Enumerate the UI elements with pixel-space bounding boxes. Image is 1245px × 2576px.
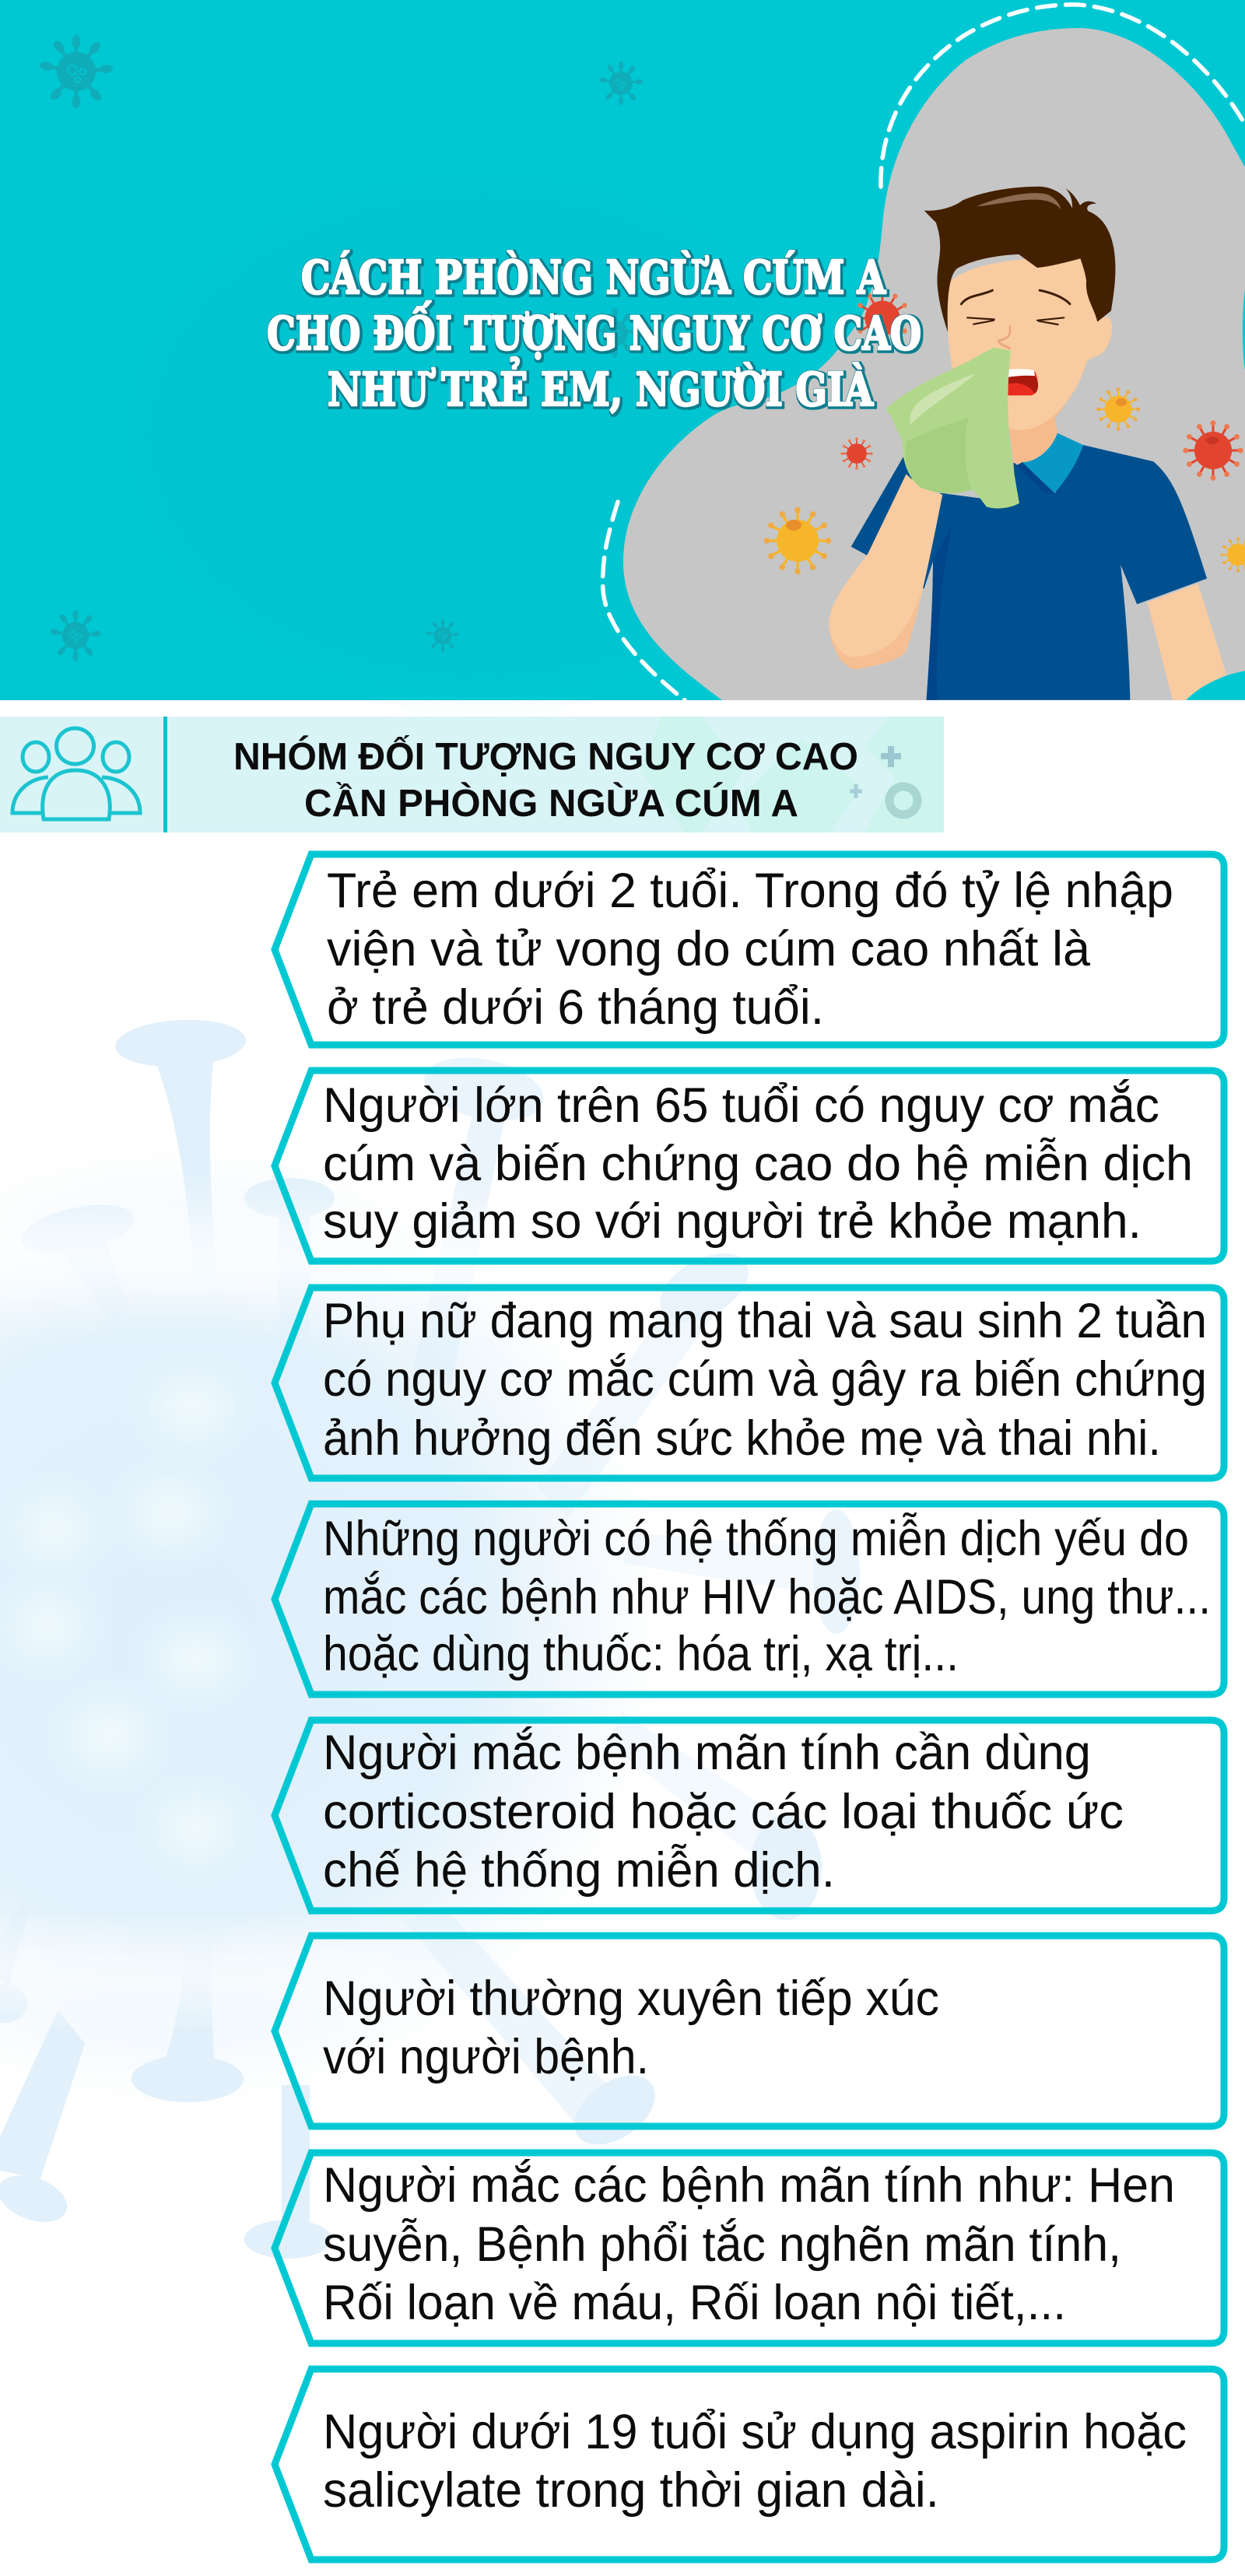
callout 2: adults over 65: suy giảm so với người trẻ khỏe mạnh. — [323, 1194, 1142, 1249]
panel: header banner — [0, 0, 1245, 700]
callout 5: chronic disease corticosteroid: corticosteroid hoặc các loại thuốc ức — [323, 1785, 1124, 1839]
title: CÁCH PHÒNG NGỪA CÚM A — [301, 250, 886, 304]
virus spike: far right lower — [607, 1712, 822, 1920]
background: large pale virus — [0, 1017, 860, 2259]
virus spike: upper left — [17, 1196, 156, 1377]
callout 1: children under 2 — [275, 854, 1224, 1045]
callout 1: children under 2: viện và tử vong do cúm cao nhất là — [327, 922, 1091, 976]
virus surface highlights — [12, 1377, 233, 1858]
icon: orange virus right of face — [1096, 387, 1140, 431]
callout 7: chronic conditions: Rối loạn về máu, Rối loạn nội tiết,... — [323, 2276, 1066, 2330]
section heading text: NHÓM ĐỐI TƯỢNG NGUY CƠ CAO — [233, 735, 858, 778]
title — [267, 250, 921, 416]
virus spike: bottom — [132, 1906, 244, 2102]
divider — [163, 717, 167, 832]
callout 2: adults over 65: Người lớn trên 65 tuổi có nguy cơ mắc — [323, 1078, 1159, 1133]
nose — [998, 325, 1011, 349]
icon: large orange virus — [764, 507, 831, 574]
callout 8: aspirin use under 19: salicylate trong thời gian dài. — [323, 2463, 939, 2518]
callout 3: pregnant women — [275, 1288, 1224, 1478]
callout 7: chronic conditions: suyễn, Bệnh phổi tắc nghẽn mãn tính, — [323, 2217, 1121, 2272]
icon: red virus far right — [1183, 420, 1243, 481]
callout 6: contact with patients: Người thường xuyên tiếp xúc — [323, 1971, 939, 2026]
callout 8: aspirin use under 19: Người dưới 19 tuổi sử dụng aspirin hoặc — [323, 2405, 1187, 2459]
callout 8: aspirin use under 19 — [275, 2369, 1224, 2560]
callout 5: chronic disease corticosteroid: chế hệ thống miễn dịch. — [323, 1843, 835, 1898]
callout 1: children under 2: Trẻ em dưới 2 tuổi. Trong đó tỷ lệ nhập — [327, 864, 1173, 918]
handkerchief — [886, 348, 1019, 508]
callout 5: chronic disease corticosteroid: Người mắc bệnh mãn tính cần dùng — [323, 1726, 1091, 1780]
virus spike: lower right — [405, 1906, 668, 2159]
callout 6: contact with patients: với người bệnh. — [323, 2030, 649, 2084]
callout 3: pregnant women: Phụ nữ đang mang thai và sau sinh 2 tuần — [323, 1294, 1207, 1348]
decorative hexagons — [640, 717, 944, 832]
virus spike: far right middle — [622, 1509, 860, 1634]
illustration: sneezing man — [829, 187, 1245, 700]
virus spike: upper right — [244, 1178, 335, 1385]
virus body — [0, 1144, 661, 2108]
virus spike: lower left — [0, 2010, 85, 2231]
callout 2: adults over 65 — [275, 1071, 1224, 1261]
neck — [1009, 408, 1057, 463]
title: CHO ĐỐI TƯỢNG NGUY CƠ CAO — [267, 300, 921, 360]
callout 7: chronic conditions: Người mắc các bệnh mãn tính như: Hen — [323, 2158, 1175, 2213]
dashed outline bottom — [603, 502, 685, 700]
icon: small red virus — [840, 437, 873, 470]
panel: section heading band — [0, 717, 944, 832]
title: NHƯ TRẺ EM, NGƯỜI GIÀ — [328, 356, 874, 416]
callout 2: adults over 65: cúm và biến chứng cao do hệ miễn dịch — [323, 1137, 1193, 1191]
virus spike: upper middle — [412, 1048, 549, 1385]
dashed outline top — [881, 5, 1245, 187]
icon: group of people — [12, 728, 140, 819]
grey blob background — [623, 28, 1245, 700]
hair — [924, 187, 1115, 332]
callout 4: weak immune system: hoặc dùng thuốc: hóa trị, xạ trị... — [323, 1627, 959, 1681]
right arm — [1148, 584, 1226, 700]
callout 3: pregnant women: có nguy cơ mắc cúm và gây ra biến chứng — [323, 1352, 1207, 1407]
virus spike: lower middle — [244, 2085, 331, 2259]
callout 4: weak immune system: Những người có hệ thống miễn dịch yếu do — [323, 1512, 1189, 1566]
virus spike: top — [114, 1017, 247, 1276]
section heading text — [233, 735, 858, 825]
callout 1: children under 2: ở trẻ dưới 6 tháng tuổi. — [327, 980, 824, 1035]
icon: red virus behind title — [854, 290, 910, 346]
shirt — [914, 445, 1207, 700]
teal cuff bottom right — [1186, 671, 1245, 700]
face — [947, 257, 1112, 430]
virus spike: left — [0, 1883, 36, 2023]
virus spike: far right upper — [537, 1239, 760, 1517]
callout 6: contact with patients — [275, 1936, 1224, 2126]
collar — [1022, 433, 1083, 493]
callout 7: chronic conditions — [275, 2153, 1224, 2343]
callout 4: weak immune system — [275, 1504, 1224, 1695]
eyebrows and eyes — [961, 290, 1070, 324]
decorative faint viruses — [39, 35, 643, 661]
callout 3: pregnant women: ảnh hưởng đến sức khỏe mẹ và thai nhi. — [323, 1411, 1161, 1466]
left sleeve — [851, 457, 912, 556]
decorative plus and ring marks — [850, 746, 917, 815]
left arm — [829, 474, 942, 669]
callout 5: chronic disease corticosteroid — [275, 1720, 1224, 1911]
mouth — [1008, 370, 1038, 395]
icon: orange virus at edge — [1220, 537, 1245, 573]
section heading text: CẦN PHÒNG NGỪA CÚM A — [304, 782, 798, 825]
